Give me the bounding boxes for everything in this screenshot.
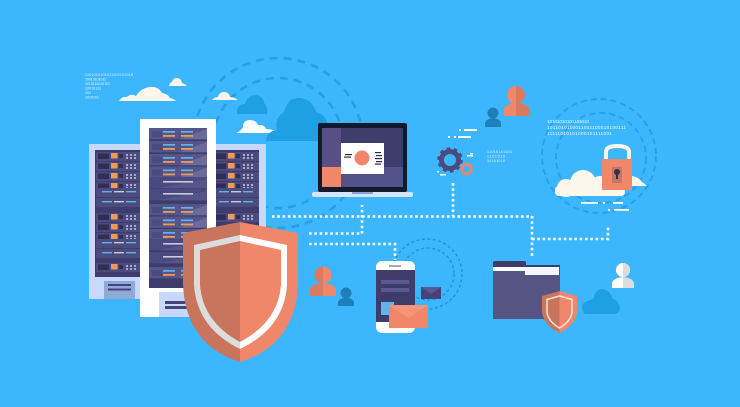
main shield <box>183 222 298 362</box>
laptop <box>312 123 413 197</box>
white dash marks under lock <box>581 202 629 211</box>
front rack rows <box>149 128 207 278</box>
icon: padlock <box>602 146 632 190</box>
clouds: white top left <box>119 78 283 133</box>
icon: purple gear <box>439 149 461 171</box>
rack rows: right <box>213 152 259 222</box>
front rack foot <box>159 292 199 317</box>
cloud: blue right <box>582 289 620 314</box>
binary text: gears <box>487 150 512 163</box>
white dash marks near gears <box>437 129 477 176</box>
binary text: top left: 10010101011 <box>85 78 106 82</box>
icon: blue user top <box>485 108 501 127</box>
dotted connectors <box>272 183 608 260</box>
binary text: top left: 1101010101011100101010 <box>85 73 133 77</box>
binary text: top left: 10010111 <box>85 86 101 90</box>
binary text: lock: 10101010101101010 <box>547 119 589 124</box>
dashed orbit circles: phone <box>392 239 462 309</box>
binary text: gears: 10101010 <box>487 159 505 163</box>
clouds: blue <box>237 95 330 141</box>
server rack: back panel <box>89 144 266 299</box>
rack foot <box>104 281 135 299</box>
binary text: top left: 1010110010101 <box>85 82 110 86</box>
icon: large envelope <box>389 305 428 328</box>
binary text: gears: 1101010 <box>487 154 505 158</box>
icon: white user <box>612 263 634 288</box>
rack rows: left <box>96 152 142 272</box>
icon: blue user bottom <box>338 288 354 306</box>
binary text: top left <box>85 73 133 100</box>
dashed orbit circles: lock <box>542 99 656 213</box>
binary text: top left: 1010101 <box>85 96 99 100</box>
folder <box>493 261 560 319</box>
laptop screen card <box>341 143 384 174</box>
dashed orbit circles: data center <box>193 58 363 228</box>
folder shield <box>542 291 577 333</box>
binary text: lock: 11111010101000101111001 <box>547 131 612 136</box>
icon: salmon user top <box>504 86 530 116</box>
icon: small salmon gear <box>460 163 472 175</box>
icon: small envelope <box>421 287 441 299</box>
smartphone <box>376 261 415 333</box>
binary text: lock <box>547 119 626 136</box>
binary text: lock: 1011010110011001100010100111 <box>547 125 626 130</box>
server rack: front <box>140 119 216 317</box>
binary text: gears: 11010101101 <box>487 150 512 154</box>
cloud behind lock <box>555 170 647 197</box>
binary text: top left: 101 <box>85 91 91 95</box>
icon: salmon user bottom <box>310 266 336 296</box>
